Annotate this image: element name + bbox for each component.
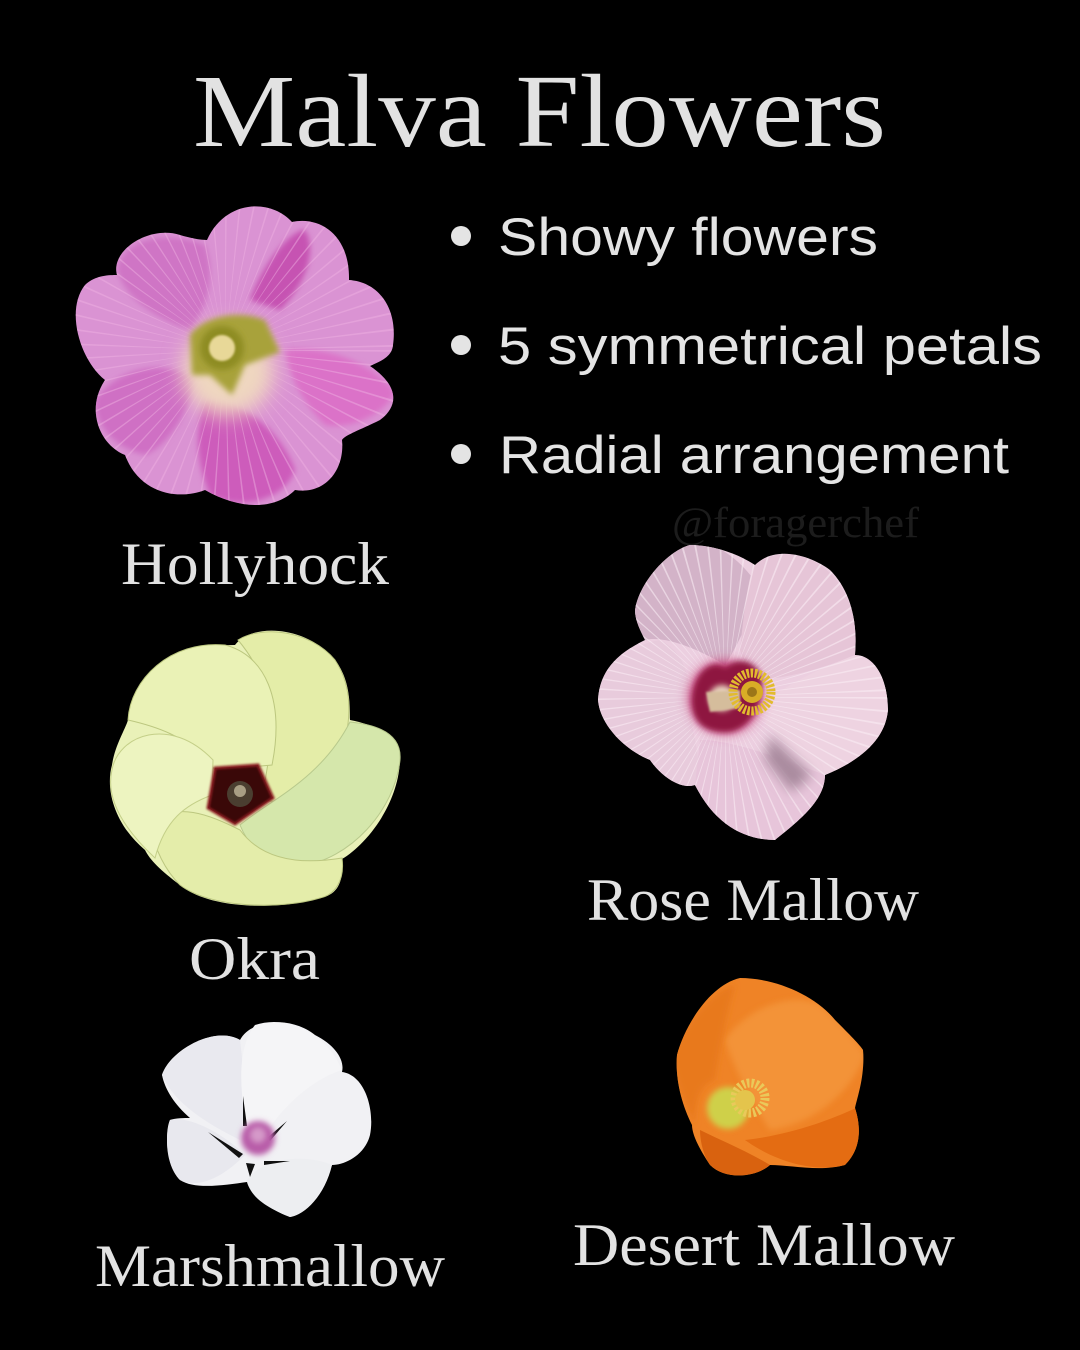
bullet list: Showy flowers [498,208,878,267]
flower: hollyhock [76,206,395,505]
bullet list [451,208,1042,485]
label: Hollyhock: Hollyhock [121,531,389,597]
flower: marshmallow [162,1022,371,1217]
title: Malva Flowers [193,54,886,169]
label: Okra: Okra [189,926,320,992]
flower: desert mallow [670,978,865,1176]
label: Desert Mallow: Desert Mallow [573,1212,956,1278]
watermark: @foragerchef [672,500,920,547]
bullet list: 5 symmetrical petals [498,317,1042,376]
flower: okra [110,631,400,906]
label: Marshmallow: Marshmallow [95,1233,446,1299]
bullet list: Radial arrangement [499,426,1009,485]
flower: rose mallow [590,540,888,840]
label: Rose Mallow: Rose Mallow [587,867,920,933]
